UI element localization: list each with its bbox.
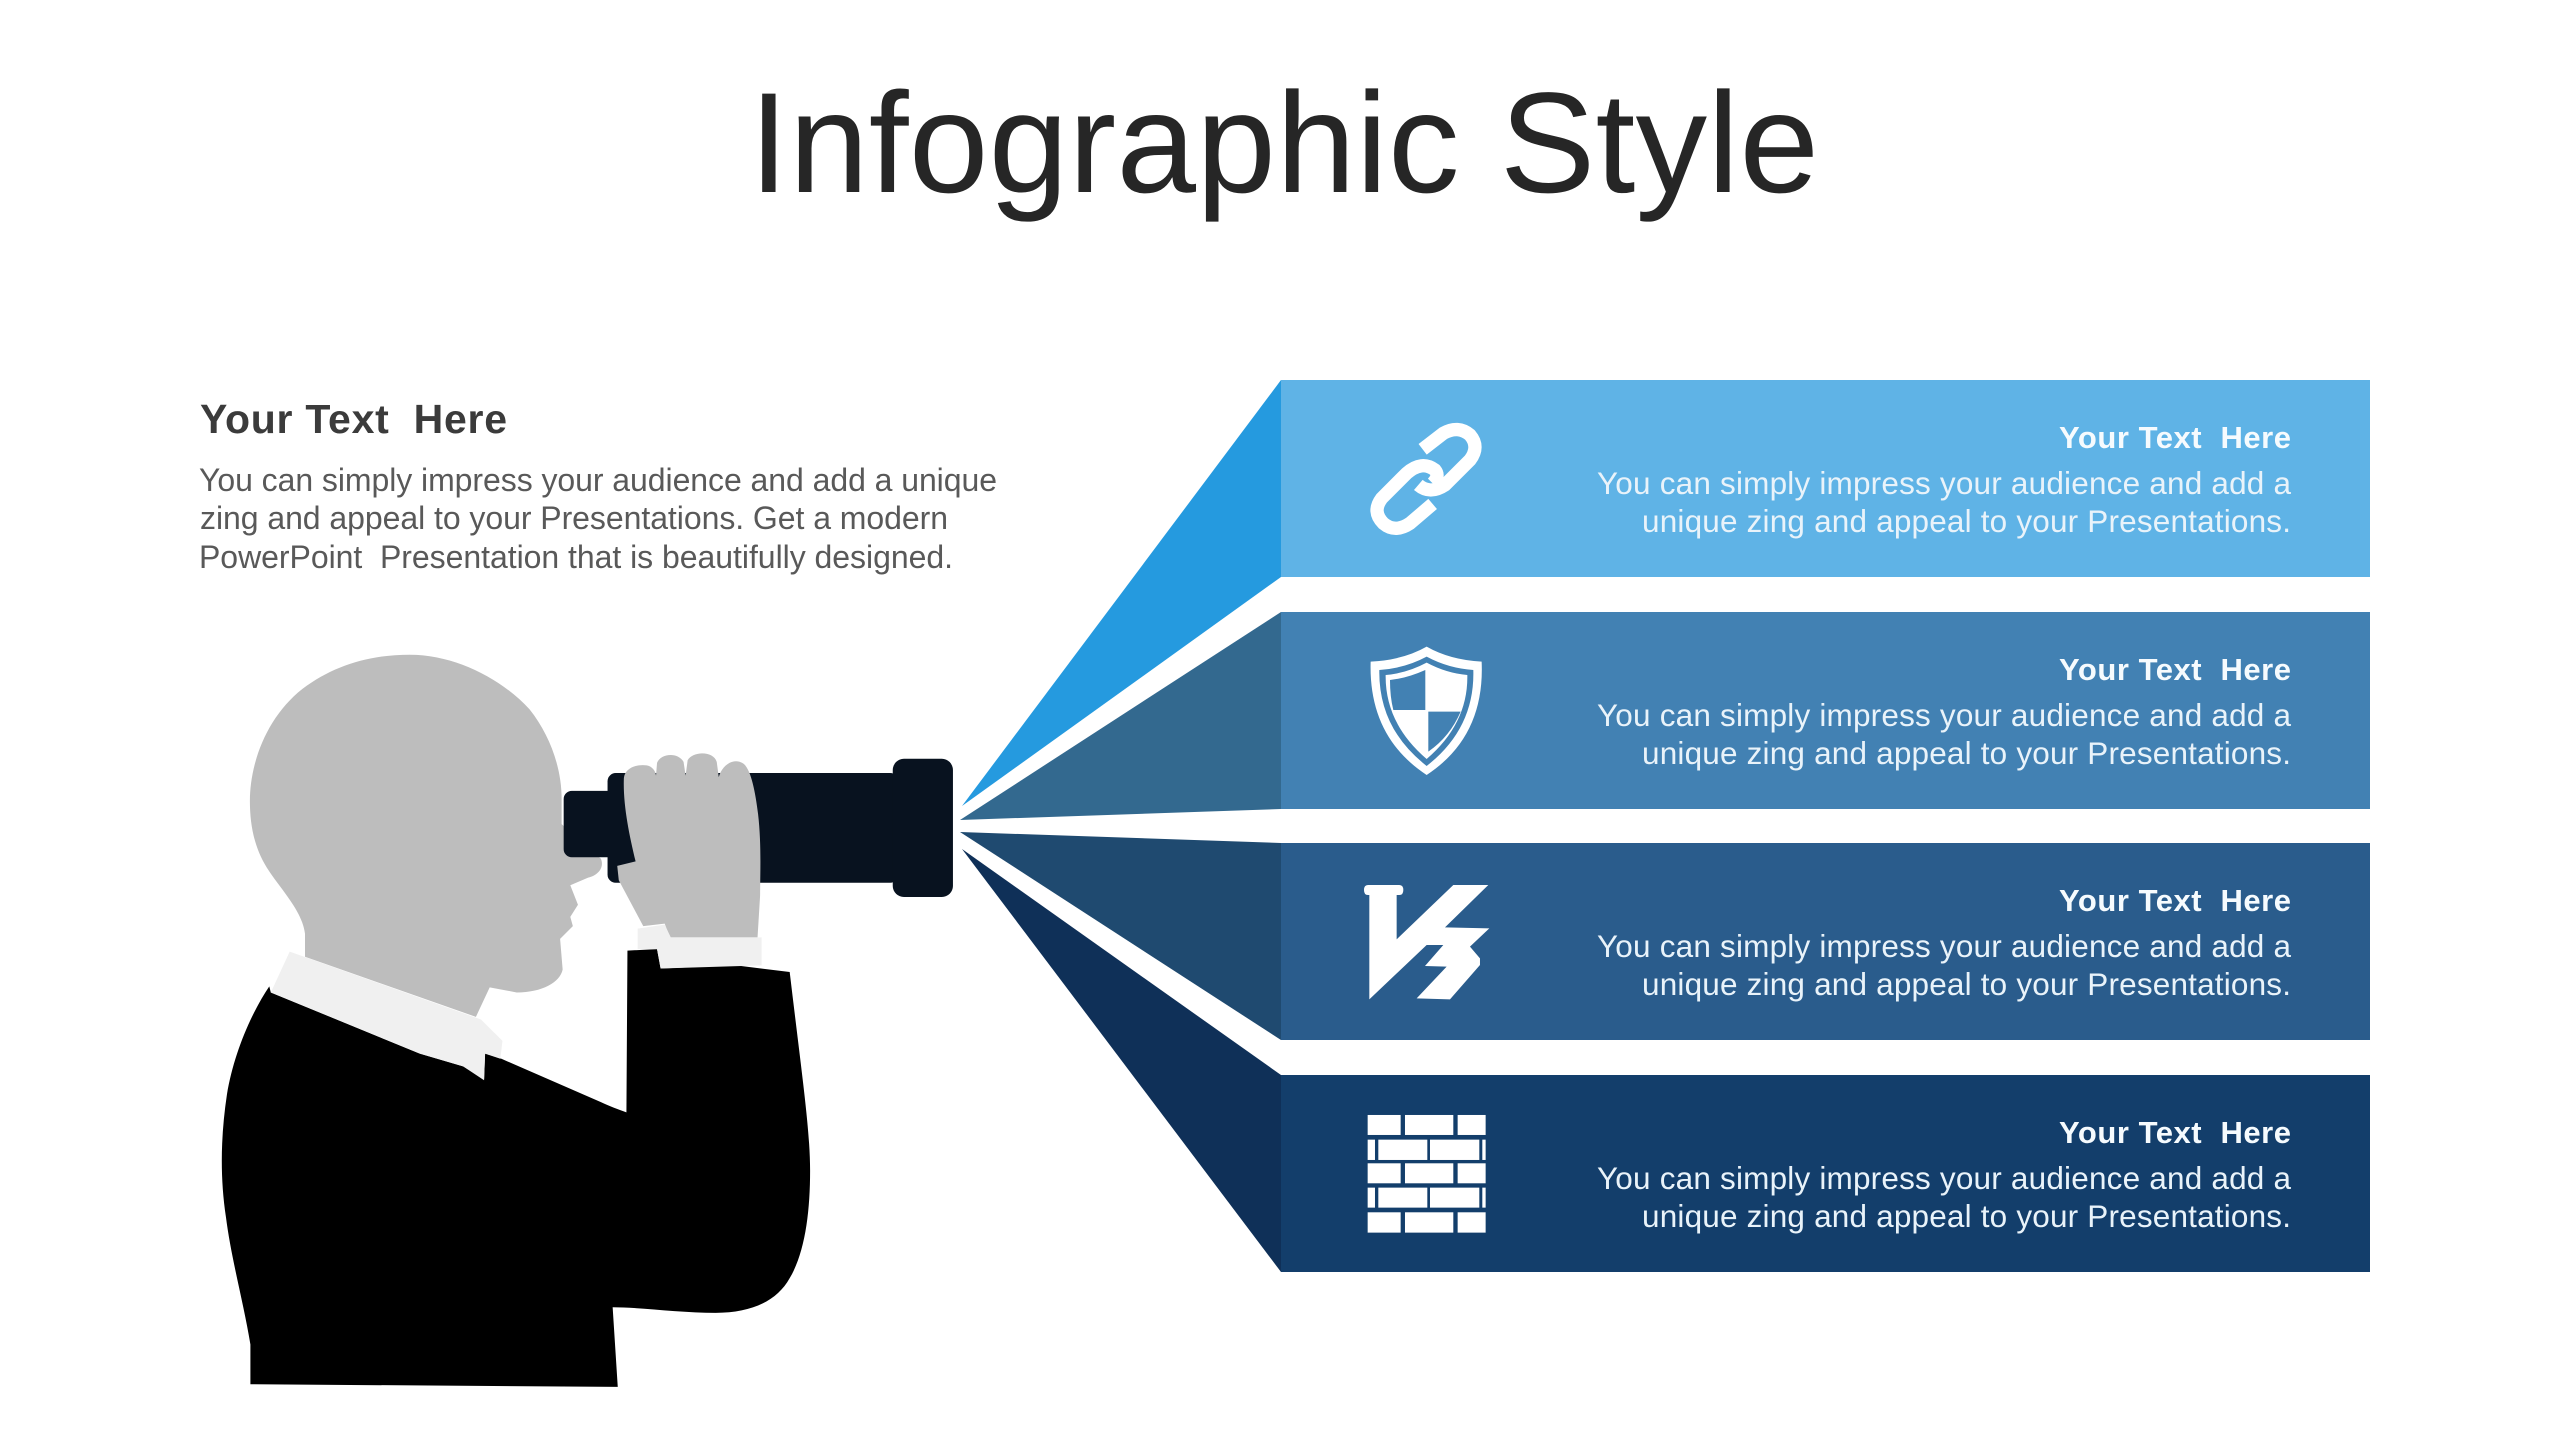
- text 3: unique zing and appeal to your Presentations.: [1642, 966, 2291, 1002]
- icon: V3 mark: [1364, 885, 1489, 999]
- side face 4: [962, 849, 1281, 1272]
- text 2: [1597, 652, 2291, 771]
- text 2: Your Text Here: [2059, 652, 2291, 687]
- side face 1: [962, 380, 1281, 806]
- left body text: zing and appeal to your Presentations. Get a modern: [200, 500, 948, 536]
- panel 2: shield: [960, 612, 2370, 820]
- panel 1: chain: [962, 380, 2370, 806]
- front face 1: [1281, 380, 2370, 577]
- left heading: Your Text Here: [200, 396, 507, 442]
- left body text: PowerPoint Presentation that is beautifully designed.: [199, 539, 953, 575]
- shirt cuff: [638, 925, 762, 968]
- left text block: [199, 396, 997, 575]
- text 2: You can simply impress your audience and add a: [1597, 697, 2291, 733]
- left body text: You can simply impress your audience and add a unique: [199, 462, 997, 498]
- text 1: [1597, 420, 2291, 539]
- text 3: You can simply impress your audience and add a: [1597, 928, 2291, 964]
- panel 4: brick wall: [962, 849, 2370, 1272]
- text 4: Your Text Here: [2059, 1115, 2291, 1150]
- front face 4: [1281, 1075, 2370, 1272]
- jacket: [222, 949, 810, 1387]
- side face 2: [960, 612, 1281, 820]
- shirt collar: [271, 952, 502, 1080]
- text 1: unique zing and appeal to your Presentations.: [1642, 503, 2291, 539]
- text 4: [1597, 1115, 2291, 1234]
- text 4: unique zing and appeal to your Presentations.: [1642, 1198, 2291, 1234]
- side face 3: [960, 832, 1281, 1040]
- icon: shield: [1371, 647, 1482, 775]
- person with binoculars: [222, 655, 953, 1387]
- hand: [617, 753, 760, 937]
- icon: brick wall: [1368, 1115, 1486, 1233]
- text 3: [1597, 883, 2291, 1002]
- text 2: unique zing and appeal to your Presentations.: [1642, 735, 2291, 771]
- text 1: Your Text Here: [2059, 420, 2291, 455]
- text 1: You can simply impress your audience and add a: [1597, 465, 2291, 501]
- front face 2: [1281, 612, 2370, 809]
- icon: chain link: [1377, 430, 1475, 528]
- panel 3: V3 mark: [960, 832, 2370, 1040]
- binoculars: [564, 759, 953, 897]
- head: [250, 655, 602, 1017]
- text 4: You can simply impress your audience and add a: [1597, 1160, 2291, 1196]
- text 3: Your Text Here: [2059, 883, 2291, 918]
- left body text: [199, 462, 997, 575]
- front face 3: [1281, 843, 2370, 1040]
- title: Infographic Style: [749, 64, 1819, 223]
